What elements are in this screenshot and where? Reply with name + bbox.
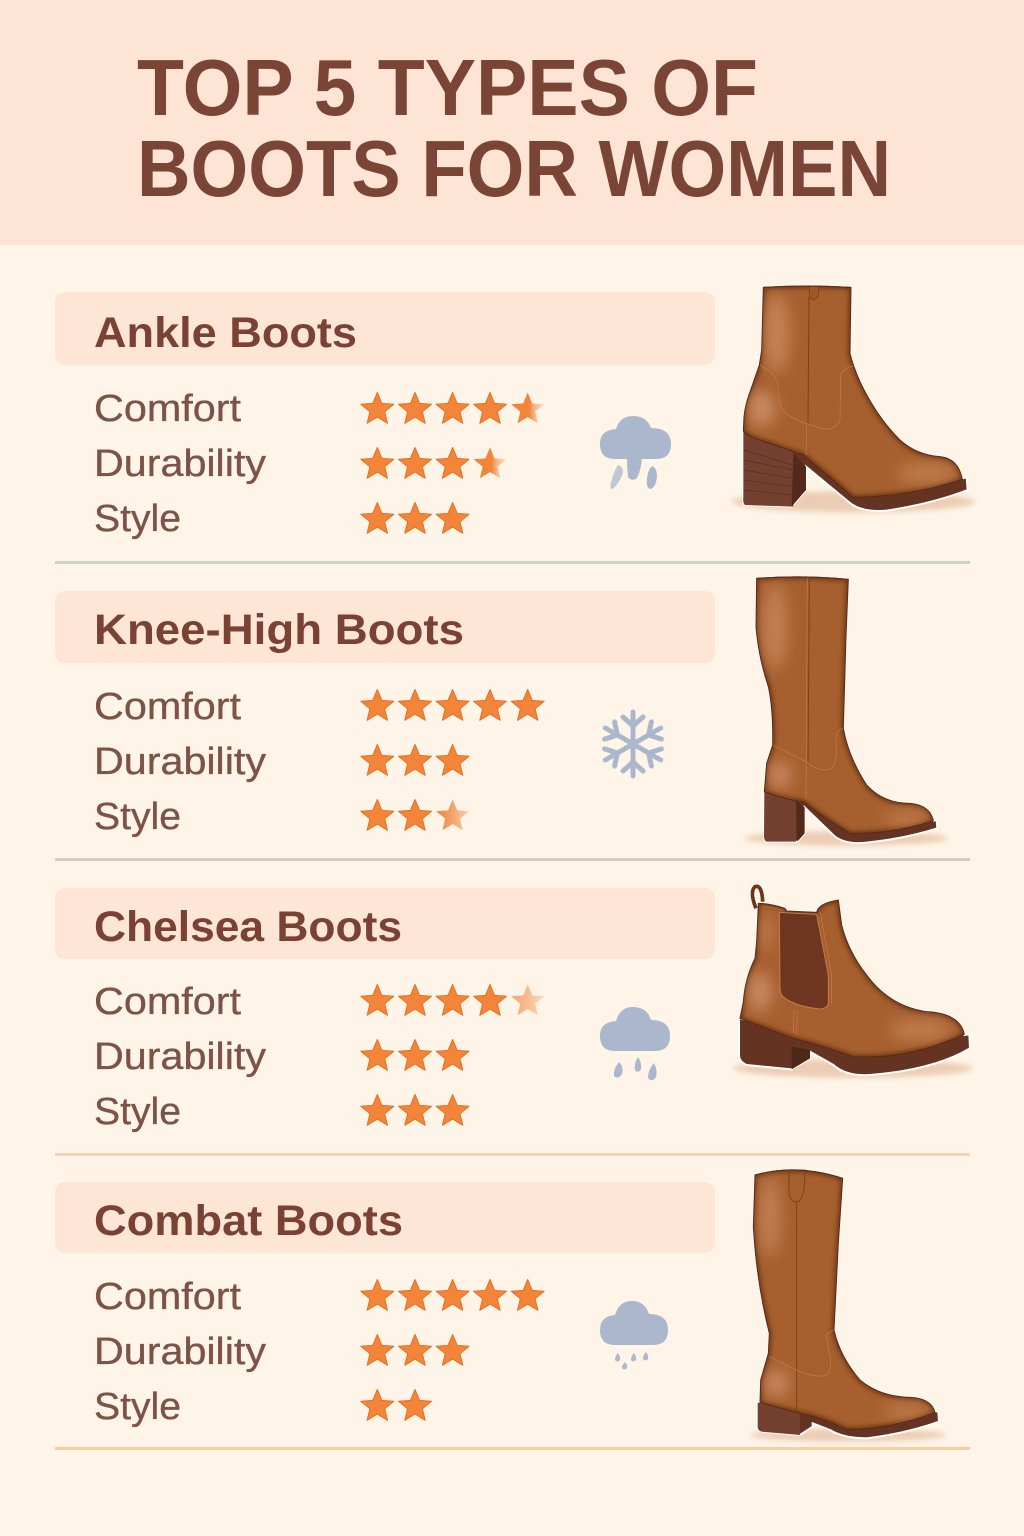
ratings labels: Style bbox=[94, 498, 181, 540]
ratings labels: Durability bbox=[94, 1036, 266, 1078]
header band bbox=[0, 0, 1024, 245]
ratings labels: Style bbox=[94, 1091, 181, 1133]
ratings labels: Durability bbox=[94, 741, 266, 783]
ratings labels bbox=[94, 388, 266, 540]
divider bbox=[55, 561, 970, 564]
divider bbox=[55, 858, 970, 861]
title: TOP 5 TYPES OF bbox=[137, 43, 758, 132]
durability stars bbox=[361, 448, 506, 478]
ratings labels: Comfort bbox=[94, 686, 241, 728]
panel: combat boots bbox=[55, 1160, 980, 1450]
comfort stars bbox=[361, 984, 544, 1015]
panel: knee-high boots bbox=[55, 570, 980, 860]
style stars bbox=[361, 502, 469, 533]
ratings labels: Style bbox=[94, 796, 181, 838]
heading: ankle boots: Ankle Boots bbox=[94, 309, 357, 357]
durability stars bbox=[361, 1040, 469, 1070]
heading band: combat boots bbox=[55, 1182, 715, 1253]
comfort stars bbox=[361, 392, 544, 423]
title bbox=[137, 43, 891, 213]
ratings labels: Durability bbox=[94, 1331, 266, 1373]
heading: knee-high boots: Knee-High Boots bbox=[94, 606, 464, 654]
style stars bbox=[361, 1094, 469, 1125]
boot: knee-high bbox=[744, 576, 949, 848]
style stars bbox=[361, 800, 469, 830]
ratings labels bbox=[94, 686, 266, 838]
ratings labels: Comfort bbox=[94, 1276, 241, 1318]
divider bbox=[55, 1447, 970, 1450]
heading band: knee-high boots bbox=[55, 591, 715, 663]
ratings labels: Comfort bbox=[94, 388, 241, 430]
ratings labels: Style bbox=[94, 1386, 181, 1428]
title: BOOTS FOR WOMEN bbox=[137, 124, 891, 213]
heading band: chelsea boots bbox=[55, 888, 715, 959]
heading: chelsea boots: Chelsea Boots bbox=[94, 903, 402, 951]
divider bbox=[55, 1153, 970, 1156]
heading band: ankle boots bbox=[55, 292, 715, 365]
durability stars bbox=[361, 744, 469, 775]
heading: combat boots: Combat Boots bbox=[94, 1197, 403, 1245]
icon: rain cloud bbox=[600, 416, 671, 489]
icon: rain cloud bbox=[600, 1301, 668, 1370]
ratings labels bbox=[94, 981, 266, 1133]
boot: chelsea bbox=[732, 884, 974, 1080]
boot: ankle bbox=[730, 285, 976, 516]
ratings labels: Durability bbox=[94, 443, 266, 485]
durability stars bbox=[361, 1334, 469, 1365]
sole cleats bbox=[747, 1058, 953, 1075]
panel: ankle boots bbox=[55, 270, 1000, 540]
comfort stars bbox=[361, 1280, 544, 1310]
ratings labels bbox=[94, 1276, 266, 1428]
style stars bbox=[361, 1390, 432, 1420]
panel: chelsea boots bbox=[55, 875, 990, 1133]
boot: combat bbox=[750, 1169, 947, 1444]
icon: rain cloud bbox=[600, 1007, 670, 1080]
comfort stars bbox=[361, 690, 544, 720]
icon: snowflake bbox=[600, 712, 666, 776]
ratings labels: Comfort bbox=[94, 981, 241, 1023]
